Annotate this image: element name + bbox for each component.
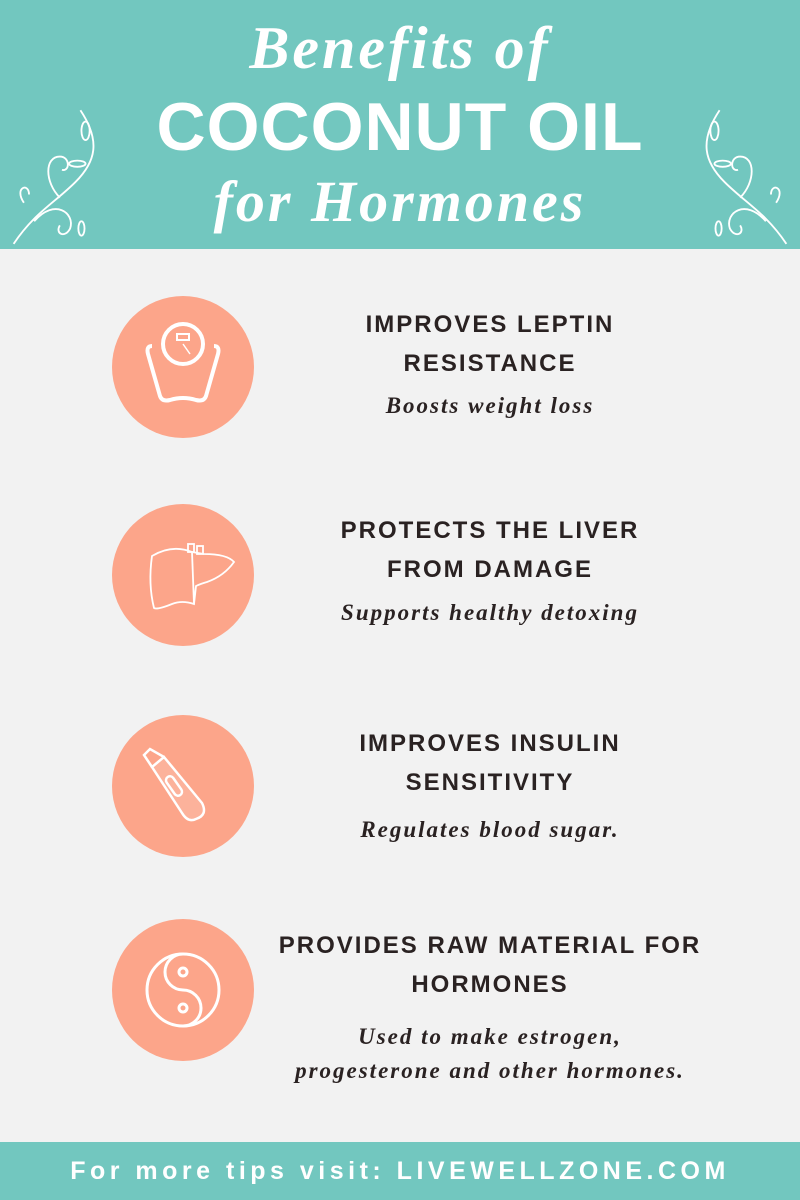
sub: liver: Supports healthy detoxing bbox=[341, 600, 639, 625]
text: leptin: RESISTANCE bbox=[404, 350, 576, 377]
text: raw material: PROVIDES RAW MATERIAL FOR bbox=[279, 932, 701, 959]
sub: raw material bbox=[294, 1024, 685, 1083]
icon: yin yang bbox=[112, 919, 254, 1061]
title line 1: Benefits of bbox=[249, 15, 551, 81]
text: leptin: IMPROVES LEPTIN bbox=[366, 311, 614, 338]
text: raw material: HORMONES bbox=[411, 971, 569, 998]
text: insulin bbox=[359, 730, 621, 796]
icon: liver bbox=[112, 504, 254, 646]
text: insulin: SENSITIVITY bbox=[406, 769, 574, 796]
sub: leptin: Boosts weight loss bbox=[386, 393, 594, 418]
sub: raw material: progesterone and other hormones. bbox=[295, 1058, 685, 1083]
ornament right bbox=[706, 110, 788, 244]
icon: insulin pen bbox=[112, 715, 254, 857]
text: leptin bbox=[366, 311, 614, 377]
title line 2: COCONUT OIL bbox=[157, 89, 643, 165]
icon: scale bbox=[112, 296, 254, 438]
text: liver: FROM DAMAGE bbox=[387, 556, 593, 583]
sub: raw material: Used to make estrogen, bbox=[358, 1024, 622, 1049]
text: liver: PROTECTS THE LIVER bbox=[341, 517, 639, 544]
footer: For more tips visit: LIVEWELLZONE.COM bbox=[70, 1157, 730, 1185]
text: insulin: IMPROVES INSULIN bbox=[359, 730, 621, 757]
sub: insulin: Regulates blood sugar. bbox=[360, 817, 620, 842]
text: raw material bbox=[279, 932, 701, 998]
header bbox=[0, 0, 800, 249]
title line 3: for Hormones bbox=[214, 169, 586, 234]
footer bbox=[0, 1142, 800, 1200]
text: liver bbox=[341, 517, 639, 583]
ornament left bbox=[12, 110, 94, 244]
